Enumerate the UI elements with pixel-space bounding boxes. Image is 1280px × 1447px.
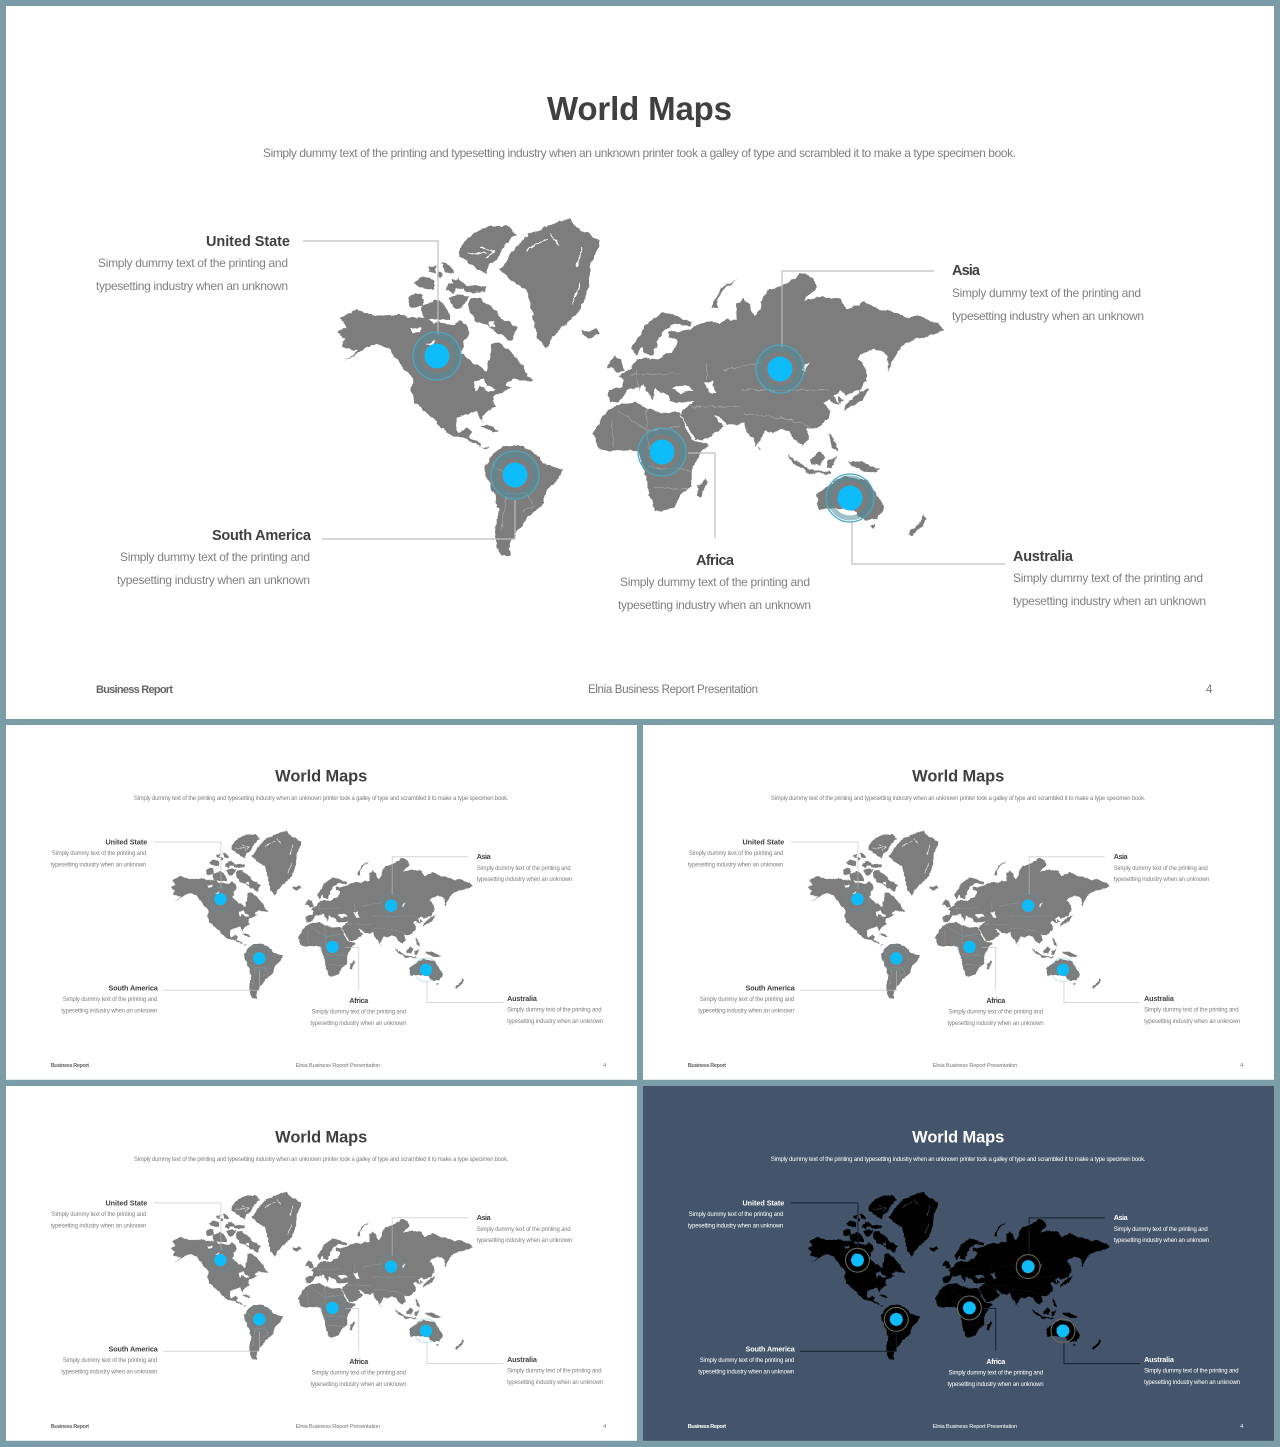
panel: small slide top left: typesetting industry when an unknown	[507, 1019, 603, 1025]
slide background	[6, 6, 1274, 719]
panel: small slide top left: Africa	[349, 996, 369, 1005]
panel: small slide bottom left: Simply dummy text of the printing and	[312, 1371, 406, 1377]
panel: small slide bottom left: typesetting industry when an unknown	[477, 1238, 572, 1244]
panel: small slide bottom left: Simply dummy text of the printing and	[507, 1369, 602, 1375]
panel: small slide bottom left: Simply dummy text of the printing and typesetting industry when an unknown printer took a galley of type and scrambled it to make a type specimen book.	[134, 1157, 509, 1163]
footer: 4	[1206, 684, 1213, 696]
panel: small slide top right: Simply dummy text of the printing and	[949, 1010, 1043, 1016]
callout: Asia: Simply dummy text of the printing and	[952, 286, 1141, 300]
panel: small dark slide bottom right: Africa	[986, 1357, 1006, 1366]
callout: Australia: Simply dummy text of the printing and	[1013, 571, 1203, 585]
panel: small dark slide bottom right: Elnia Business Report Presentation	[933, 1424, 1017, 1430]
panel: small slide top right: Australia	[1144, 994, 1175, 1003]
panel: small slide top right	[643, 725, 1274, 1080]
panel: small slide top left: Simply dummy text of the printing and	[477, 866, 571, 872]
callout: United State: typesetting industry when an unknown	[96, 279, 288, 293]
callout: Africa	[618, 453, 811, 612]
callout: Africa: Africa	[696, 553, 735, 569]
callout: South America	[117, 500, 515, 587]
callout: United State: Simply dummy text of the printing and	[98, 256, 288, 270]
panel: small slide bottom left: 4	[603, 1424, 607, 1430]
footer	[96, 684, 1213, 696]
panel: small slide bottom left: Australia	[507, 1355, 538, 1364]
panel: small slide top left: typesetting industry when an unknown	[311, 1021, 407, 1027]
panel: small slide bottom left: Elnia Business Report Presentation	[296, 1424, 380, 1430]
panel: small slide bottom left: typesetting industry when an unknown	[507, 1380, 603, 1386]
panel: small slide bottom left: United State	[106, 1198, 147, 1207]
panel: small slide top left: Simply dummy text of the printing and typesetting industry when an unknown printer took a galley of type and scrambled it to make a type specimen book.	[134, 796, 509, 802]
panel: small dark slide bottom right: typesetting industry when an unknown	[698, 1370, 794, 1376]
panel: small slide top right: World Maps	[912, 768, 1004, 786]
panel: small slide top right: Simply dummy text of the printing and	[689, 851, 783, 857]
callout: Africa: Simply dummy text of the printing and	[620, 575, 810, 589]
location markers	[413, 332, 874, 522]
callout: Africa: typesetting industry when an unknown	[618, 598, 811, 612]
callout: Australia	[852, 522, 1206, 608]
callout: South America: typesetting industry when an unknown	[117, 573, 310, 587]
panel: small slide top left: 4	[603, 1063, 607, 1069]
panel: small slide top left	[6, 725, 637, 1080]
panel: small dark slide bottom right: typesetting industry when an unknown	[688, 1223, 783, 1229]
footer: Elnia Business Report Presentation	[588, 684, 758, 696]
panel: small slide bottom left: Simply dummy text of the printing and	[52, 1212, 146, 1218]
panel: small dark slide bottom right	[643, 1086, 1274, 1441]
panel: small slide top right: typesetting industry when an unknown	[1114, 877, 1209, 883]
panel: small dark slide bottom right: typesetting industry when an unknown	[1114, 1238, 1209, 1244]
panel: small slide top right: South America	[746, 984, 796, 993]
panel: small dark slide bottom right: Simply dummy text of the printing and typesetting industry when an unknown printer took a galley of type and scrambled it to make a type specimen book.	[771, 1157, 1146, 1163]
panel: small slide bottom left	[6, 1086, 637, 1441]
panel: small slide top left: United State	[106, 837, 147, 846]
panel: small dark slide bottom right: typesetting industry when an unknown	[948, 1382, 1044, 1388]
panel: small slide top right: typesetting industry when an unknown	[688, 862, 783, 868]
panel: small dark slide bottom right: Business Report	[688, 1424, 726, 1430]
panel: small slide top left: Asia	[477, 852, 492, 861]
panel: small slide bottom left: Asia	[477, 1213, 492, 1222]
panel: small slide top right: Asia	[1114, 852, 1129, 861]
panel: small slide top left: Australia	[507, 994, 538, 1003]
panel: small slide top left: Simply dummy text of the printing and	[52, 851, 146, 857]
panel: small slide top right: typesetting industry when an unknown	[948, 1021, 1044, 1027]
panel: small slide top right: 4	[1240, 1063, 1244, 1069]
panel: small dark slide bottom right: South America	[746, 1345, 796, 1354]
panel: small slide top left: Simply dummy text of the printing and	[507, 1008, 602, 1014]
panel: small dark slide bottom right: Asia	[1114, 1213, 1129, 1222]
panel: small slide top right: Business Report	[688, 1063, 726, 1069]
subtitle: Simply dummy text of the printing and typesetting industry when an unknown printer took a galley of type and scrambled it to make a type specimen book.	[263, 146, 1016, 160]
panel: small slide top left: Business Report	[51, 1063, 89, 1069]
panel: small slide bottom left: typesetting industry when an unknown	[311, 1382, 407, 1388]
panel: small slide bottom left: typesetting industry when an unknown	[61, 1370, 157, 1376]
footer: Business Report	[96, 684, 173, 696]
callout: Australia: typesetting industry when an unknown	[1013, 594, 1206, 608]
panel: small slide top left: Elnia Business Report Presentation	[296, 1063, 380, 1069]
panel: small dark slide bottom right: United State	[743, 1198, 784, 1207]
panel: small slide top left: typesetting industry when an unknown	[477, 877, 572, 883]
callout: Asia: typesetting industry when an unknown	[952, 309, 1144, 323]
panel: small slide bottom left: World Maps	[275, 1129, 367, 1147]
callout: Asia	[782, 263, 1144, 347]
panel: small slide bottom left: Simply dummy text of the printing and	[477, 1227, 571, 1233]
panel: small slide top right: United State	[743, 837, 784, 846]
panel: small slide bottom left: Simply dummy text of the printing and	[63, 1358, 157, 1364]
panel: small dark slide bottom right: Australia	[1144, 1355, 1175, 1364]
panel: small slide top left: typesetting industry when an unknown	[61, 1009, 157, 1015]
panel: small slide top left: typesetting industry when an unknown	[51, 862, 146, 868]
panel: small slide top right: Simply dummy text of the printing and	[1114, 866, 1208, 872]
callout: United State: United State	[206, 234, 290, 250]
panel: small slide top left: Simply dummy text of the printing and	[312, 1010, 406, 1016]
panel: small slide top right: typesetting industry when an unknown	[698, 1009, 794, 1015]
panel: small slide top left: South America	[109, 984, 159, 993]
panel: small slide bottom left: Business Report	[51, 1424, 89, 1430]
panel: small slide bottom left: typesetting industry when an unknown	[51, 1223, 146, 1229]
callout: South America: Simply dummy text of the printing and	[120, 550, 310, 564]
panel: small slide top left: Simply dummy text of the printing and	[63, 997, 157, 1003]
panel: small slide top right: Elnia Business Report Presentation	[933, 1063, 1017, 1069]
callout: United State	[96, 234, 438, 335]
panel: small dark slide bottom right: Simply dummy text of the printing and	[1114, 1227, 1208, 1233]
panel: small slide top right: Simply dummy text of the printing and	[700, 997, 794, 1003]
panel: small dark slide bottom right: World Maps	[912, 1129, 1004, 1147]
panel: small slide bottom left: South America	[109, 1345, 159, 1354]
panel: small dark slide bottom right: Simply dummy text of the printing and	[689, 1212, 783, 1218]
panel: small slide top left: World Maps	[275, 768, 367, 786]
panel: small dark slide bottom right: typesetting industry when an unknown	[1144, 1380, 1240, 1386]
panel: small dark slide bottom right: Simply dummy text of the printing and	[700, 1358, 794, 1364]
panel: small slide bottom left: Africa	[349, 1357, 369, 1366]
callout: Asia: Asia	[952, 263, 981, 279]
panel: small slide top right: Africa	[986, 996, 1006, 1005]
panel: small dark slide bottom right: Simply dummy text of the printing and	[949, 1371, 1043, 1377]
panel: small dark slide bottom right: Simply dummy text of the printing and	[1144, 1369, 1239, 1375]
panel: main slide	[6, 6, 1274, 719]
panel: small slide top right: Simply dummy text of the printing and	[1144, 1008, 1239, 1014]
callout: South America: South America	[212, 528, 312, 544]
panel: small dark slide bottom right: 4	[1240, 1424, 1244, 1430]
callout: Australia: Australia	[1013, 549, 1074, 565]
title: World Maps	[547, 90, 732, 127]
panel: small slide top right: Simply dummy text of the printing and typesetting industry when an unknown printer took a galley of type and scrambled it to make a type specimen book.	[771, 796, 1146, 802]
world map	[337, 218, 945, 557]
panel: small slide top right: typesetting industry when an unknown	[1144, 1019, 1240, 1025]
